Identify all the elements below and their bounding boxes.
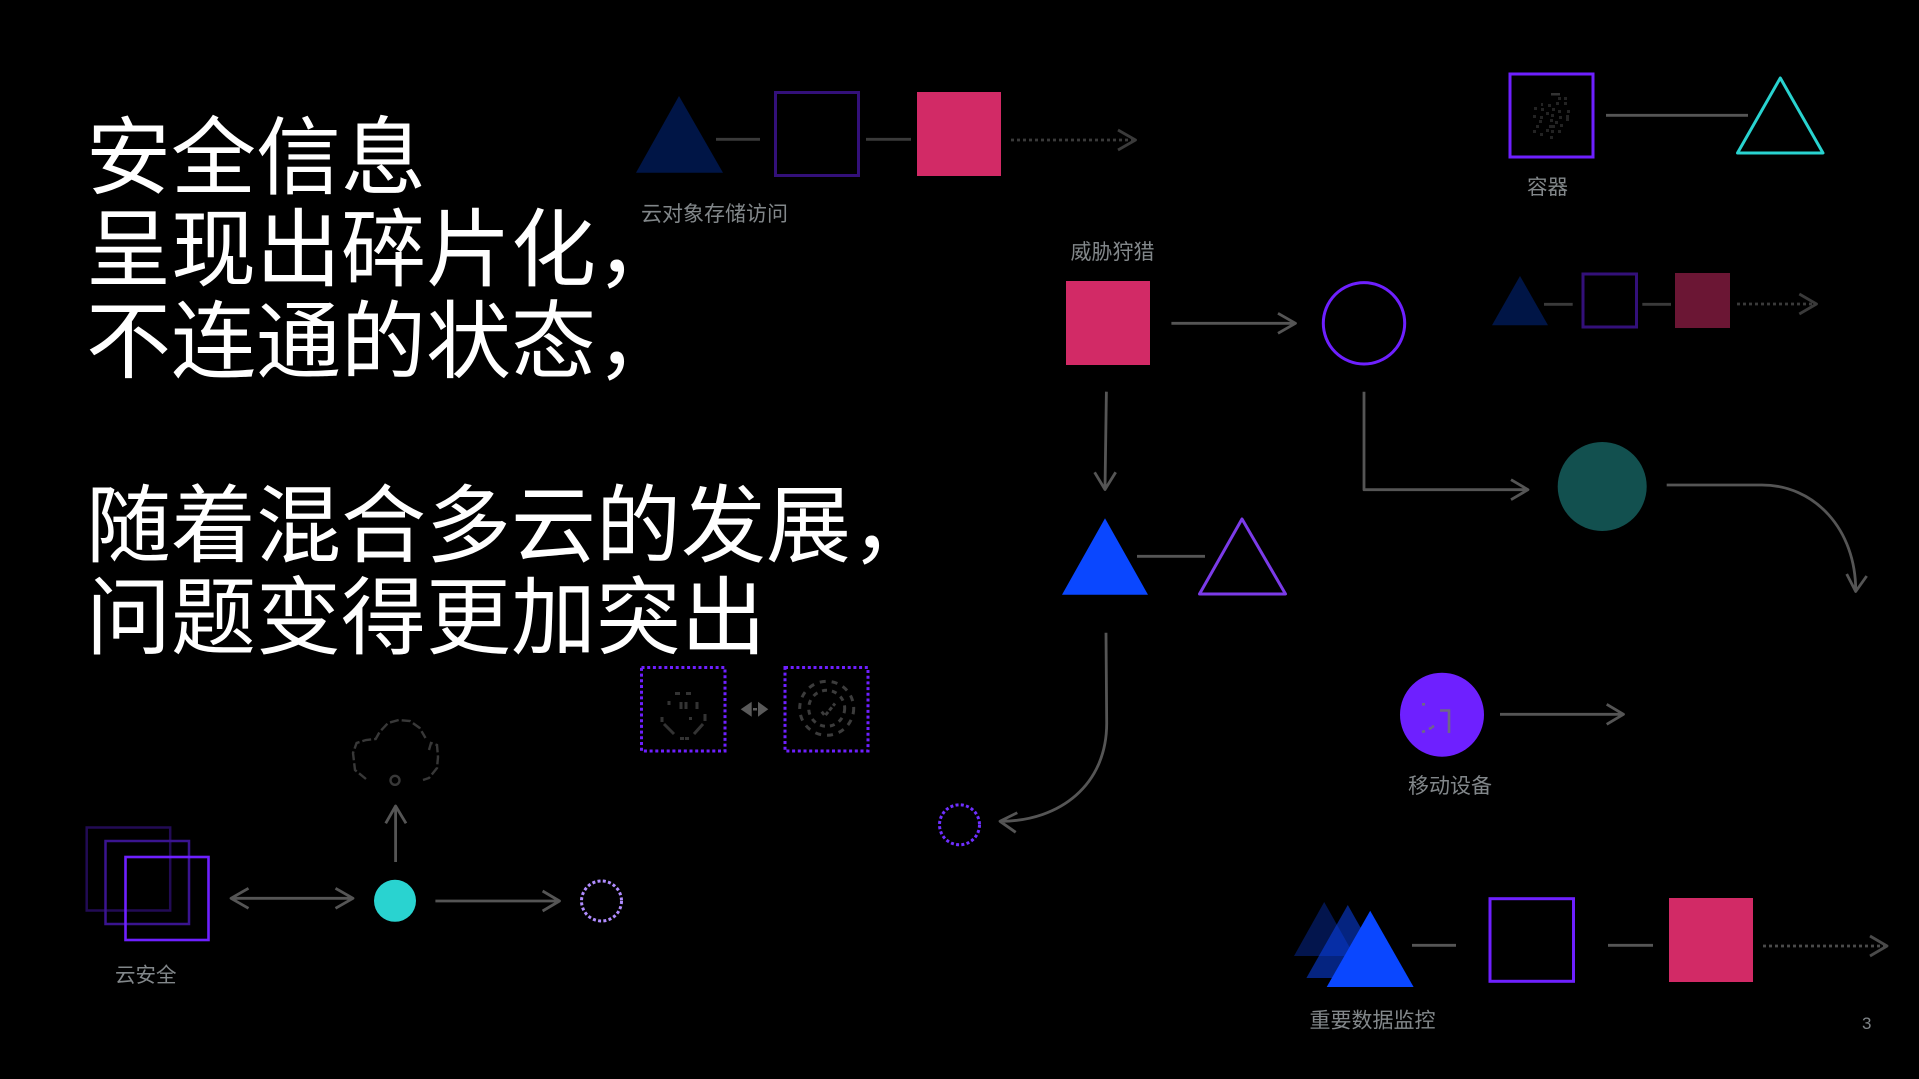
- title: 问题变得更加突出: [86, 572, 766, 666]
- arrow: square to circle: [1171, 313, 1296, 333]
- icon: mobile fragments: [1422, 704, 1449, 733]
- arrow: elbow to teal circle: [1364, 392, 1528, 500]
- title: [86, 112, 936, 666]
- flow: critical data monitoring: [1294, 898, 1887, 987]
- title: 呈现出碎片化，: [86, 204, 681, 298]
- icon: container fragments: [1533, 93, 1570, 139]
- title: 安全信息: [86, 112, 426, 206]
- flow: container: [1510, 74, 1823, 157]
- arrow: up to cloud: [386, 806, 406, 862]
- page number: 3: [1862, 1014, 1871, 1033]
- arrow: curve down: [1667, 485, 1867, 592]
- label: critical data monitoring: 重要数据监控: [1310, 1010, 1436, 1032]
- title: 随着混合多云的发展，: [86, 480, 936, 574]
- icon: person: [662, 694, 705, 738]
- label: cloud object storage access: 云对象存储访问: [641, 203, 788, 226]
- arrow: to dotted circle: [435, 891, 560, 911]
- label: mobile device: 移动设备: [1408, 775, 1492, 798]
- title: 不连通的状态，: [86, 296, 681, 390]
- icon: cloud: [353, 720, 438, 785]
- flow: cloud security: [87, 720, 621, 940]
- label: threat hunting: 威胁狩猎: [1070, 241, 1154, 264]
- icon pair: dotted squares: [642, 668, 868, 751]
- arrow: square to triangle: [1095, 392, 1116, 490]
- arrow: two-way: [231, 888, 353, 908]
- arrow: curve to dotted circle: [1000, 633, 1107, 832]
- flow: mobile device: [1400, 673, 1624, 757]
- label: cloud security: 云安全: [115, 964, 177, 987]
- arrows: double triangle: [741, 702, 768, 717]
- label: container: 容器: [1527, 176, 1568, 199]
- flow: small row: [1492, 273, 1816, 328]
- flow: cloud object storage access: [636, 92, 1136, 176]
- flow: threat hunting: [940, 281, 1867, 845]
- icon: badge check: [800, 681, 854, 735]
